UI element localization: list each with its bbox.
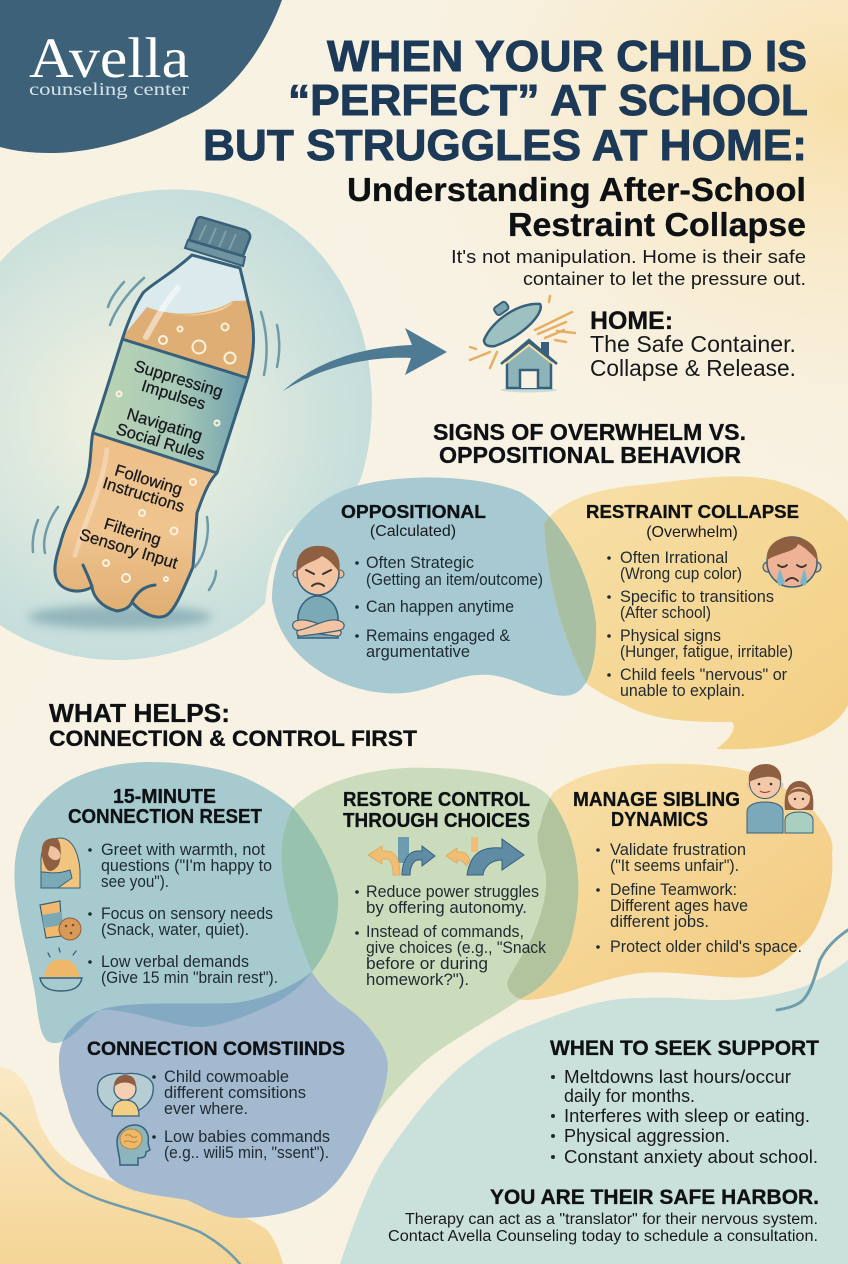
heading: manage sibling: MANAGE SIBLING xyxy=(573,789,740,811)
panel: when to seek support background xyxy=(340,960,848,1264)
list: restraint collapse signs: (After school) xyxy=(620,604,711,622)
list: restraint collapse signs: unable to explain. xyxy=(620,682,745,700)
intro text: container to let the pressure out. xyxy=(523,269,806,289)
panel: 15-minute connection reset xyxy=(14,762,338,1044)
icon: choice arrows xyxy=(368,837,524,875)
list: connection reset tips: (Snack, water, quiet). xyxy=(101,921,249,939)
list: restore control tips: by offering autonomy. xyxy=(366,899,527,917)
home text block: The Safe Container. xyxy=(590,331,796,357)
list: sibling tips: ("It seems unfair"). xyxy=(610,857,739,875)
list: restraint collapse signs xyxy=(607,549,793,700)
heading: oppositional: OPPOSITIONAL xyxy=(341,501,486,522)
bottle illustration xyxy=(28,217,279,630)
home text block: HOME: xyxy=(590,307,673,335)
closing message: Therapy can act as a "translator" for their nervous system. xyxy=(405,1211,818,1228)
bottle label: suppressing impulses: Suppressing xyxy=(132,357,225,401)
list: connection reset tips: see you"). xyxy=(101,873,169,891)
list: connection commands: Low babies commands xyxy=(164,1128,330,1146)
intro text: It's not manipulation. Home is their safe xyxy=(451,247,806,267)
main title: WHEN YOUR CHILD IS xyxy=(327,32,807,81)
fizz bubbles xyxy=(103,324,236,582)
list: connection reset tips xyxy=(88,841,278,987)
list: connection reset tips: (Give 15 min "brain rest"). xyxy=(101,969,278,987)
closing message xyxy=(388,1186,819,1245)
icon: lid popping off house xyxy=(470,296,575,392)
icon: siblings xyxy=(746,764,813,833)
main title: BUT STRUGGLES AT HOME: xyxy=(203,121,807,170)
heading: restraint collapse: RESTRAINT COLLAPSE xyxy=(586,501,799,522)
list: restraint collapse signs: Specific to transitions xyxy=(620,588,774,606)
list: warning signs: Physical aggression. xyxy=(564,1126,730,1146)
bottom-left yellow wave xyxy=(0,1067,283,1264)
bottle label: navigating social rules: Navigating xyxy=(125,405,204,445)
list: connection reset tips: Focus on sensory needs xyxy=(101,905,273,923)
list: warning signs: daily for months. xyxy=(564,1086,695,1106)
panel: manage sibling dynamics xyxy=(507,764,833,1000)
list: connection commands: ever where. xyxy=(164,1100,248,1118)
list: sibling tips: Different ages have xyxy=(610,897,748,915)
panel: connection commands xyxy=(59,972,388,1218)
list: oppositional signs: Remains engaged & xyxy=(366,627,510,645)
icon: hug xyxy=(41,838,80,888)
list: connection reset tips: Low verbal demands xyxy=(101,953,249,971)
list: restraint collapse signs: Often Irrational xyxy=(620,549,728,567)
text block: when to seek support xyxy=(550,1036,819,1167)
heading: restore control: THROUGH CHOICES xyxy=(343,810,530,832)
list: oppositional signs xyxy=(355,554,543,661)
list: restore control tips xyxy=(355,883,547,989)
list: oppositional signs: Often Strategic xyxy=(366,554,474,572)
bottle background blob xyxy=(0,189,372,660)
heading: manage sibling: DYNAMICS xyxy=(611,809,708,831)
list: oppositional signs: Can happen anytime xyxy=(366,598,514,616)
panel: restraint collapse xyxy=(544,476,848,750)
subtitle xyxy=(347,171,806,243)
subtitle: Restraint Collapse xyxy=(508,206,806,243)
list: restraint collapse signs: Child feels "nervous" or xyxy=(620,666,788,684)
list: warning signs: Constant anxiety about school. xyxy=(564,1147,818,1167)
list: connection commands xyxy=(152,1068,330,1162)
bottle label: filtering sensory input: Sensory Input xyxy=(77,526,180,573)
list: sibling tips: Define Teamwork: xyxy=(610,881,737,899)
intro text xyxy=(451,247,806,289)
list: warning signs xyxy=(551,1067,818,1167)
list: oppositional signs: argumentative xyxy=(366,643,470,661)
list: connection reset tips: Greet with warmth, not xyxy=(101,841,265,859)
comparison section heading: OPPOSITIONAL BEHAVIOR xyxy=(439,442,741,468)
icon: calm child xyxy=(97,1073,153,1116)
comparison section heading xyxy=(433,419,746,468)
list: sibling tips: different jobs. xyxy=(610,913,709,931)
list: warning signs: Meltdowns last hours/occur xyxy=(564,1067,791,1087)
closing message: YOU ARE THEIR SAFE HARBOR. xyxy=(490,1186,819,1209)
main title xyxy=(203,32,808,170)
icon: bowl of food xyxy=(40,948,82,991)
list: warning signs: Interferes with sleep or eating. xyxy=(564,1106,810,1126)
icon: brain in head xyxy=(117,1125,150,1165)
heading: restraint collapse: (Overwhelm) xyxy=(646,524,738,541)
heading: when to seek support: WHEN TO SEEK SUPPORT xyxy=(550,1036,819,1060)
bottle label: suppressing impulses: Impulses xyxy=(139,377,208,413)
list: restore control tips: Reduce power struggles xyxy=(366,883,539,901)
motion lines xyxy=(33,278,279,590)
icon: angry boy with crossed arms xyxy=(293,546,344,638)
logo panel xyxy=(0,0,282,153)
what helps heading: CONNECTION & CONTROL FIRST xyxy=(49,726,418,751)
list: restore control tips: give choices (e.g., "Snack xyxy=(366,939,547,957)
bottle shadow xyxy=(28,605,212,629)
what helps heading xyxy=(49,698,418,751)
logo wordmark: Avella xyxy=(29,27,189,90)
heading: 15-minute connection reset xyxy=(68,786,262,828)
panel: oppositional xyxy=(272,477,596,696)
decorative wave lines xyxy=(0,930,848,1264)
heading: 15-minute connection reset: CONNECTION RESET xyxy=(68,806,262,828)
arrow from bottle to home xyxy=(283,328,447,391)
main title: “PERFECT” AT SCHOOL xyxy=(288,76,808,125)
closing message: Contact Avella Counseling today to schedule a consultation. xyxy=(388,1228,818,1245)
list: sibling tips: Validate frustration xyxy=(610,841,746,859)
list: restore control tips: before or during xyxy=(366,955,488,973)
list: restore control tips: homework?"). xyxy=(366,971,469,989)
list: connection commands: different comsitions xyxy=(164,1084,306,1102)
heading: restraint collapse xyxy=(586,501,799,541)
bottle label: following instructions: Instructions xyxy=(100,474,186,516)
icon: drink and cookie xyxy=(40,901,81,940)
list: restraint collapse signs: (Wrong cup color) xyxy=(620,565,742,583)
list: sibling tips xyxy=(596,841,802,956)
what helps heading: WHAT HELPS: xyxy=(49,698,230,728)
list: restraint collapse signs: (Hunger, fatigue, irritable) xyxy=(620,643,793,661)
heading: oppositional xyxy=(341,501,486,540)
heading: 15-minute connection reset: 15-MINUTE xyxy=(113,786,216,808)
heading: restore control: RESTORE CONTROL xyxy=(343,789,530,811)
list: connection reset tips: questions ("I'm happy to xyxy=(101,857,272,875)
list: connection commands: (e.g.. wili5 min, "ssent"). xyxy=(164,1144,329,1162)
heading: restore control xyxy=(343,789,530,832)
icon: crying child xyxy=(763,537,821,587)
home text block: Collapse & Release. xyxy=(590,355,796,381)
list: connection commands: Child cowmoable xyxy=(164,1068,289,1086)
subtitle: Understanding After-School xyxy=(347,171,806,208)
list: restore control tips: Instead of commands, xyxy=(366,923,524,941)
bottle label: navigating social rules: Social Rules xyxy=(114,420,207,464)
bottle label: filtering sensory input: Filtering xyxy=(102,515,163,549)
list: restraint collapse signs: Physical signs xyxy=(620,627,721,645)
list: oppositional signs: (Getting an item/outcome) xyxy=(366,571,543,589)
heading: oppositional: (Calculated) xyxy=(370,523,456,540)
bottle cap xyxy=(185,217,250,266)
logo tagline: counseling center xyxy=(29,79,189,99)
bottle label: following instructions: Following xyxy=(113,461,184,499)
list: sibling tips: Protect older child's space. xyxy=(610,938,802,956)
home text block xyxy=(590,307,796,381)
comparison section heading: SIGNS OF OVERWHELM VS. xyxy=(433,419,746,445)
heading: manage sibling xyxy=(573,789,740,831)
panel: restore control xyxy=(282,768,578,1120)
heading: connection commands: CONNECTION COMSTIINDS xyxy=(87,1038,345,1060)
